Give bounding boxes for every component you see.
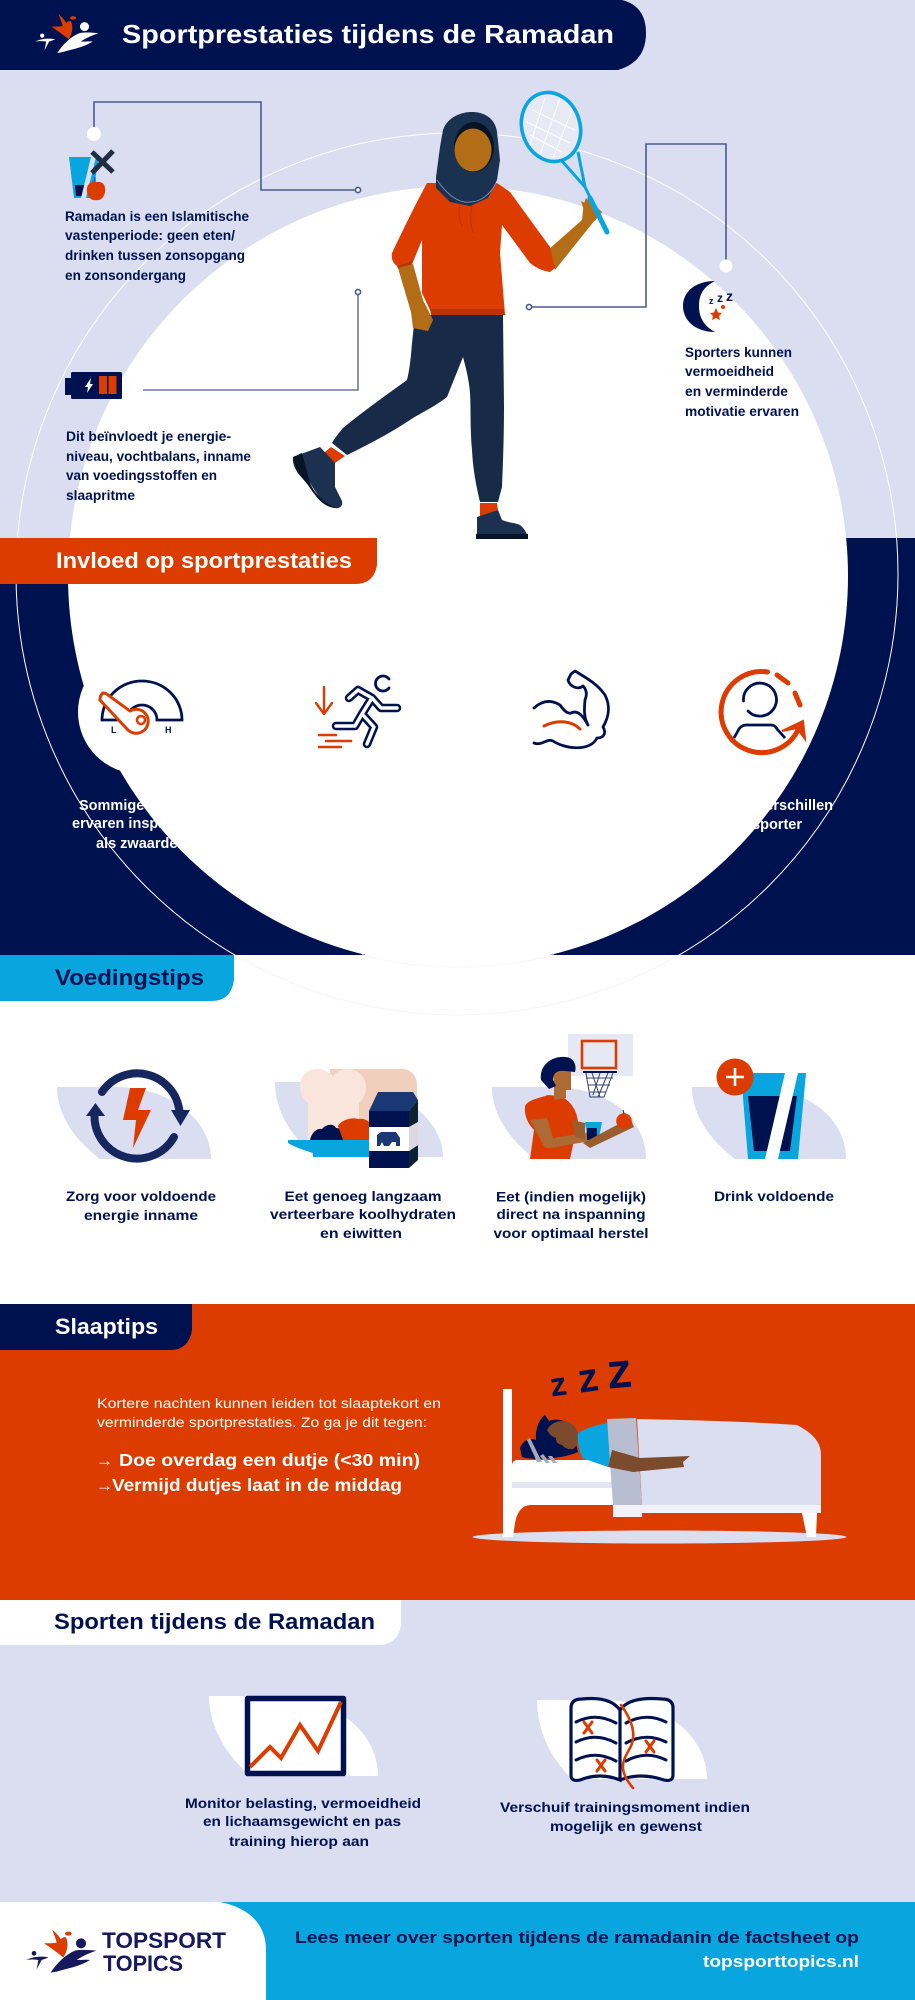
text block: vermoeidheid: motivatie ervaren	[685, 404, 799, 419]
icon: gauge: L	[111, 725, 117, 735]
tip: energie: energie inname	[84, 1207, 198, 1223]
heading: Invloed op sportprestaties: Invloed op sportprestaties	[56, 548, 352, 573]
left arm	[398, 264, 433, 331]
icon: moon with zzz: z	[726, 288, 733, 304]
text block: energie	[66, 429, 251, 503]
zzz: Z	[606, 1353, 632, 1396]
panel: trainingsmoment	[500, 1698, 750, 1834]
tip: energie: Zorg voor voldoende	[66, 1188, 216, 1204]
hijab	[436, 112, 500, 206]
text block: vermoeidheid: en verminderde	[685, 384, 788, 399]
text block: Ramadan: drinken tussen zonsopgang	[65, 248, 245, 263]
panel: invloed icons	[72, 671, 833, 852]
white circle backdrop	[68, 186, 848, 966]
tip: energie	[57, 1073, 216, 1223]
chart icon	[248, 1698, 344, 1774]
hoodie	[392, 183, 555, 315]
text block: energie: Dit beïnvloedt je energie-	[66, 429, 231, 444]
list: slaaptips: Doe overdag een dutje (<30 min)	[119, 1450, 420, 1470]
heading: Invloed op sportprestaties	[0, 538, 377, 584]
tip: drink voldoende: Drink voldoende	[714, 1188, 834, 1204]
text: intro slaap: Kortere nachten kunnen leiden tot slaaptekort en	[97, 1395, 441, 1411]
header bar	[0, 0, 646, 70]
title: Sportprestaties tijdens de Ramadan	[122, 19, 614, 49]
text: trainingsmoment: Verschuif trainingsmoment indien	[500, 1799, 750, 1815]
footer text: Lees meer over sporten tijdens de ramadanin de factsheet op	[295, 1928, 859, 1947]
icon: glass and apple crossed out	[69, 151, 113, 200]
connector: vermoeidheid	[526, 144, 732, 310]
text block: energie: slaapritme	[66, 488, 135, 503]
text block: energie: niveau, vochtbalans, inname	[66, 449, 251, 464]
text block: vermoeidheid	[685, 345, 799, 419]
text: trainingsmoment	[500, 1799, 750, 1834]
icon: moon with zzz: z	[717, 291, 723, 305]
tip: koolhydraten en eiwitten: verteerbare koolhydraten	[270, 1206, 456, 1222]
list: slaaptips: →	[96, 1451, 113, 1470]
tip: drink voldoende	[692, 1058, 846, 1204]
zzz: Z	[577, 1364, 600, 1399]
figure: woman with tennis racket	[293, 85, 607, 539]
list: slaaptips	[96, 1450, 420, 1495]
text: monitor	[185, 1795, 421, 1849]
icon: person in circular arrow	[721, 672, 805, 753]
text block: vermoeidheid: vermoeidheid	[685, 364, 774, 379]
text: inspanning zwaarder: als zwaarder	[96, 836, 183, 852]
heading: Sporten tijdens de Ramadan	[0, 1600, 401, 1645]
tip: direct na inspanning: Eet (indien mogelijk)	[496, 1188, 646, 1204]
milk carton	[369, 1092, 418, 1168]
text: inspanning zwaarder	[72, 798, 206, 852]
list: slaaptips: →	[96, 1476, 113, 1495]
text block: vermoeidheid: Sporters kunnen	[685, 345, 792, 360]
text: verschillen per sporter	[715, 798, 833, 833]
heading: Voedingstips: Voedingstips	[55, 965, 204, 990]
heading: Voedingstips	[0, 955, 234, 1001]
icon: gauge: H	[165, 725, 172, 735]
text block: Ramadan: en zonsondergang	[65, 268, 186, 283]
logo mark: header	[35, 14, 99, 53]
icon: runner with down arrow	[316, 676, 397, 747]
icon: battery	[65, 372, 122, 399]
text block: Ramadan	[65, 209, 249, 283]
heading: Slaaptips: Slaaptips	[55, 1314, 158, 1339]
book icon	[571, 1698, 673, 1788]
tip: direct na inspanning	[492, 1034, 648, 1241]
feet	[293, 447, 528, 539]
illustration: sleeping athlete in bed	[472, 1389, 846, 1544]
tip: koolhydraten en eiwitten: Eet genoeg langzaam	[284, 1188, 442, 1204]
tip: koolhydraten en eiwitten: en eiwitten	[320, 1225, 402, 1241]
footer text: topsporttopics.nl	[703, 1952, 859, 1971]
footer	[0, 1902, 915, 2000]
logo: footer: TOPSPORT	[102, 1928, 226, 1953]
basketball hoop	[568, 1034, 633, 1097]
text: intro slaap	[97, 1395, 441, 1430]
text: monitor: en lichaamsgewicht en pas	[203, 1813, 401, 1829]
panel: monitor	[185, 1696, 421, 1849]
text: verschillen per sporter: per sporter	[725, 817, 802, 833]
text: verschillen per sporter: Grote verschillen	[715, 798, 833, 814]
footer text	[295, 1928, 859, 1971]
text block: Ramadan: Ramadan is een Islamitische	[65, 209, 249, 224]
text block: energie: van voedingsstoffen en	[66, 468, 217, 483]
tip: direct na inspanning: voor optimaal herstel	[494, 1225, 648, 1241]
logo: footer	[26, 1928, 226, 1976]
text: trainingsmoment: mogelijk en gewenst	[550, 1818, 702, 1834]
icon: flexed arm	[534, 671, 609, 748]
icon: moon with zzz: z	[709, 296, 714, 306]
text: intro slaap: verminderde sportprestaties. Zo ga je dit tegen:	[97, 1414, 427, 1430]
text: monitor: training hierop aan	[229, 1833, 369, 1849]
tip: direct na inspanning: direct na inspanning	[496, 1206, 646, 1222]
zzz: Z	[549, 1373, 568, 1402]
list: slaaptips: Vermijd dutjes laat in de middag	[112, 1475, 402, 1495]
heading: Sporten tijdens de Ramadan: Sporten tijdens de Ramadan	[54, 1609, 375, 1634]
text: inspanning zwaarder: Sommige sporters	[79, 798, 206, 814]
icon: moon with zzz	[683, 281, 733, 332]
icon: gauge	[100, 681, 182, 735]
racket	[513, 85, 607, 232]
panel: slaaptips	[0, 1304, 915, 1600]
tip: koolhydraten en eiwitten	[270, 1069, 456, 1241]
right arm	[548, 198, 602, 270]
connector: energie	[143, 289, 361, 390]
heading: Slaaptips	[0, 1304, 192, 1350]
face	[454, 128, 492, 172]
text block: Ramadan: vastenperiode: geen eten/	[65, 228, 235, 243]
connector: vasten	[87, 102, 361, 193]
panel: voedingstips	[57, 1034, 846, 1241]
pants	[332, 315, 504, 502]
text: inspanning zwaarder: ervaren inspanning	[72, 816, 206, 832]
zzz	[549, 1353, 632, 1402]
text: monitor: Monitor belasting, vermoeidheid	[185, 1795, 421, 1811]
logo: footer: TOPICS	[103, 1951, 183, 1976]
